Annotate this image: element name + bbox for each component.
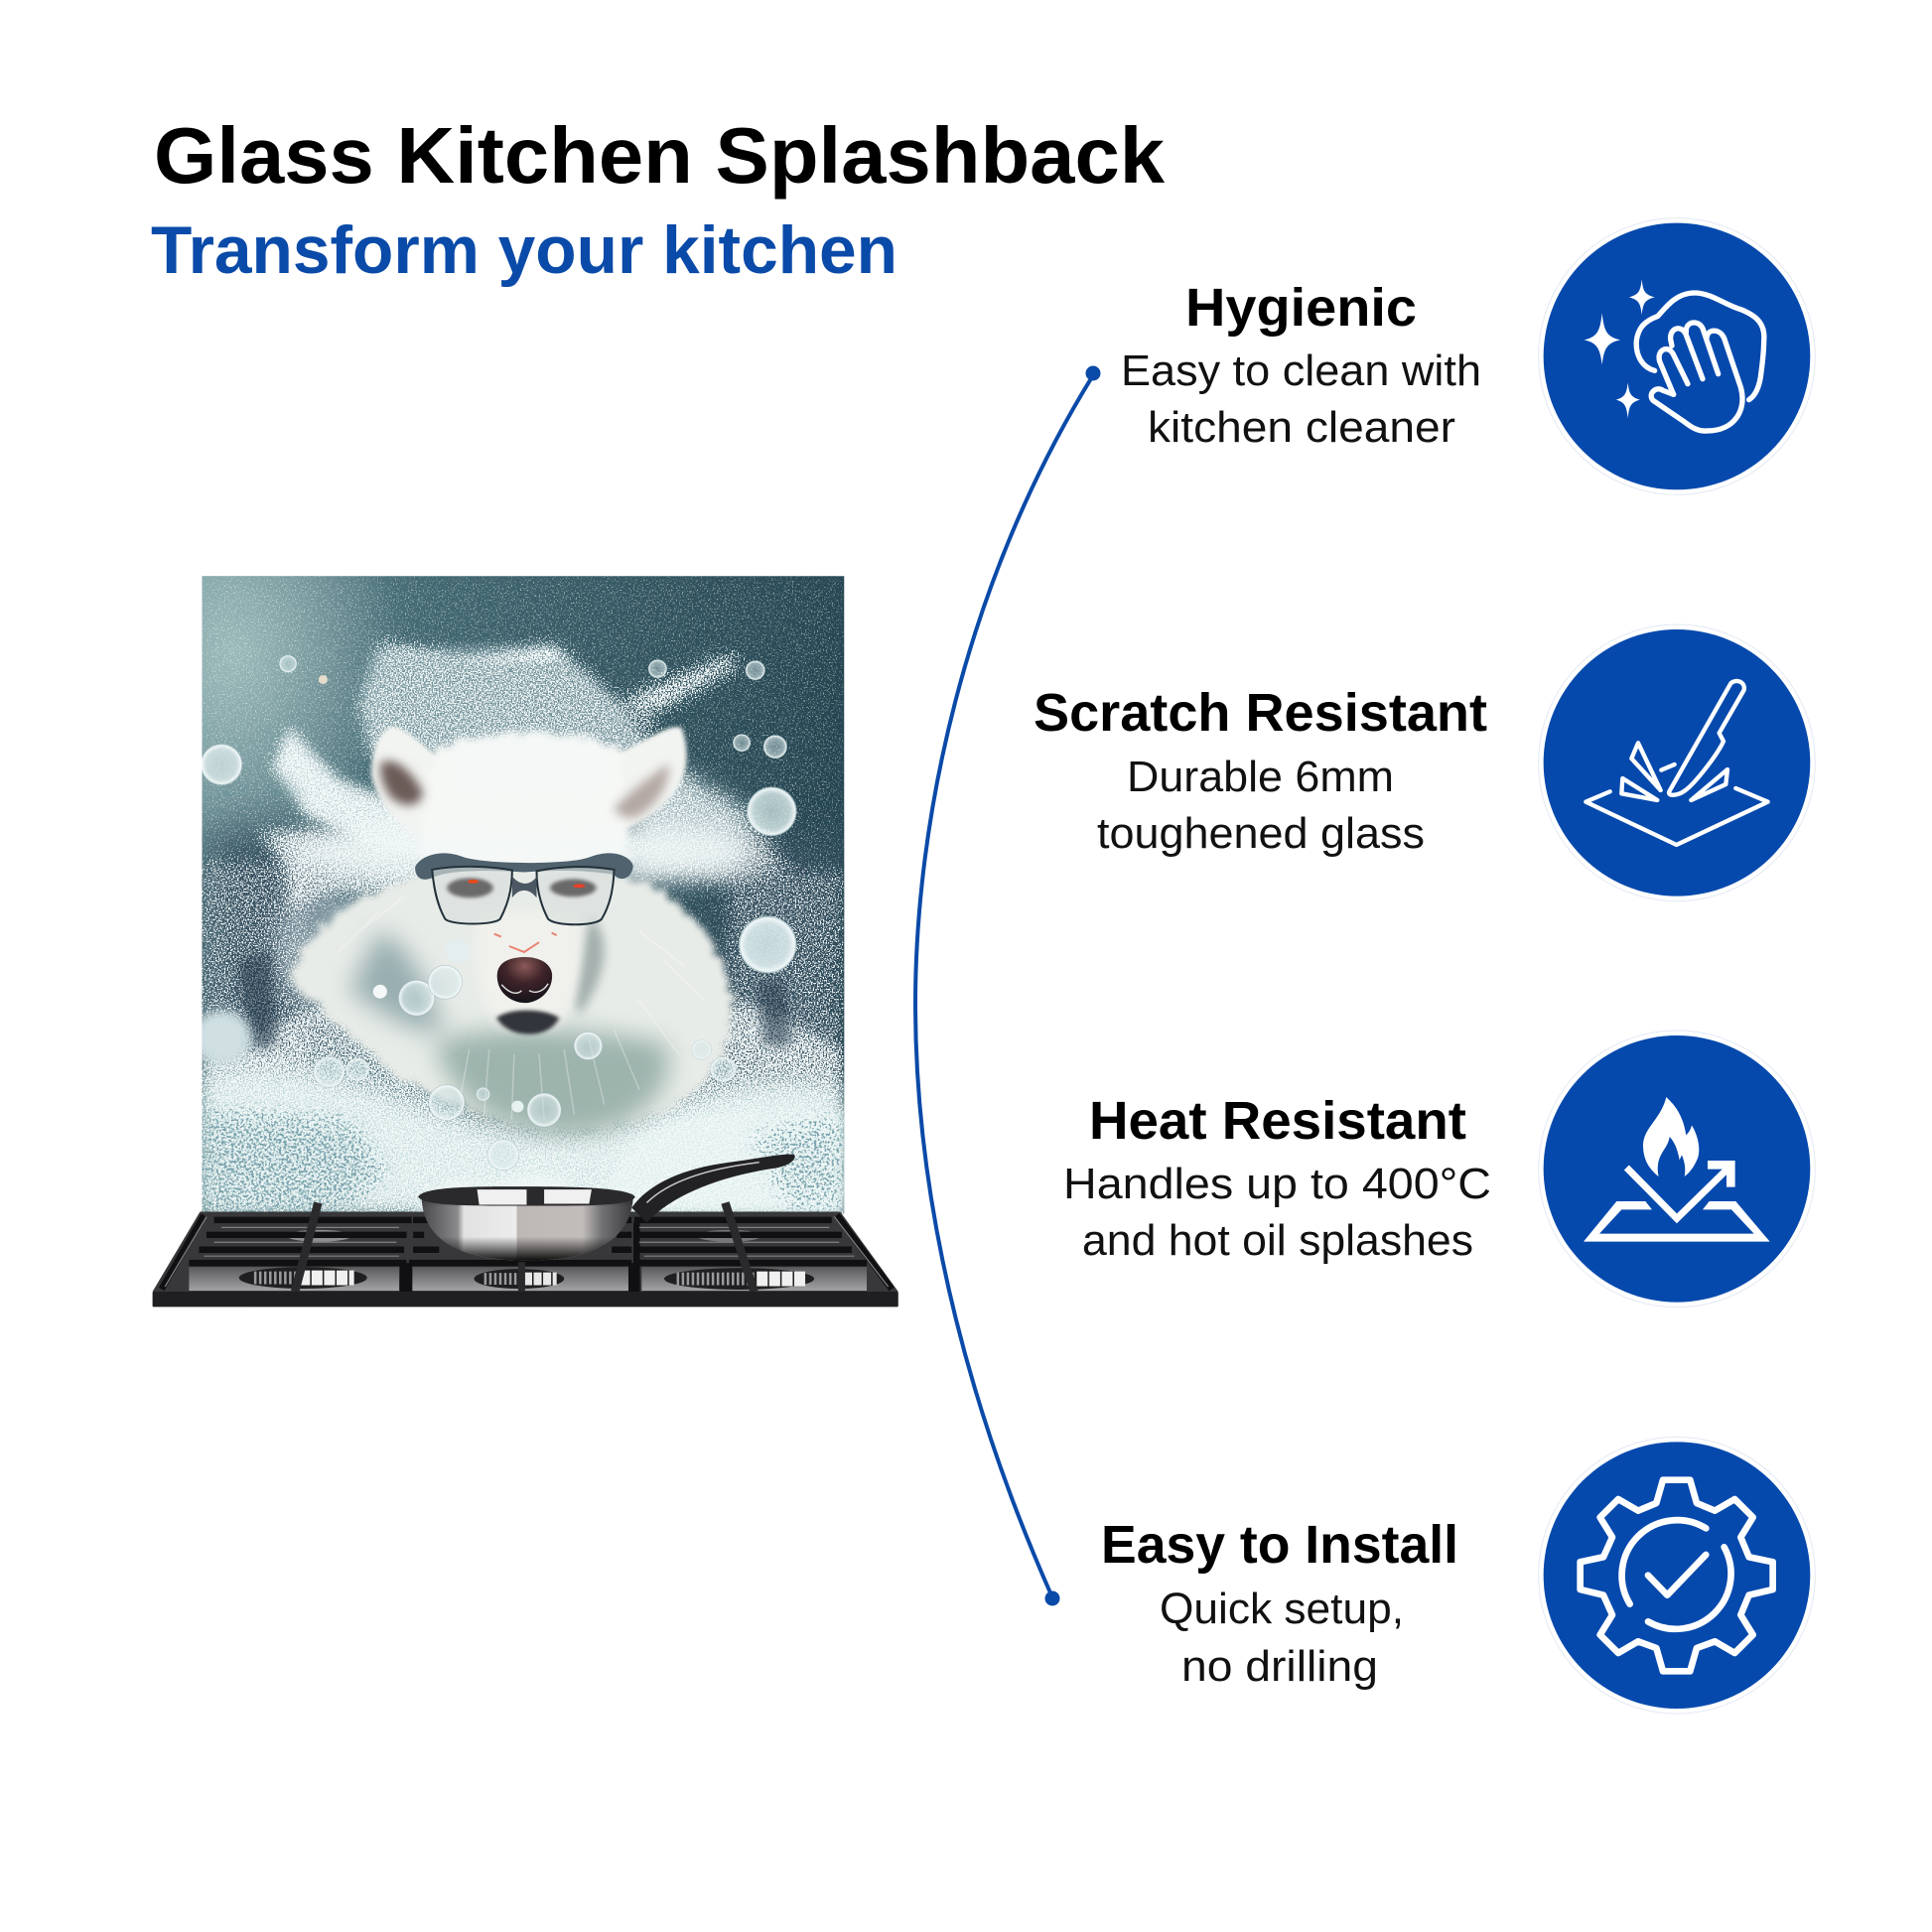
- product image: splashback above gas hob: [153, 576, 898, 1307]
- feature: Hygienic: [1121, 278, 1481, 452]
- feature: Easy to Install: Easy to Install: [1101, 1515, 1458, 1575]
- nose: [497, 957, 552, 1003]
- feature: Easy to Install: no drilling: [1181, 1642, 1378, 1691]
- feature: Scratch Resistant: Scratch Resistant: [1034, 683, 1487, 743]
- dark water behind the wolf: [202, 833, 844, 1069]
- icon: flame over heat-reflecting surface: [1539, 1031, 1815, 1308]
- feature: Hygienic: kitchen cleaner: [1148, 403, 1455, 452]
- subtitle: Transform your kitchen: [151, 212, 897, 288]
- glasses: [415, 853, 633, 924]
- burners: [239, 1230, 814, 1290]
- icon: hand wiping with sparkles: [1539, 218, 1815, 494]
- front edge: [153, 1292, 898, 1307]
- feature: Easy to Install: [1101, 1515, 1458, 1691]
- dark streaks in the water: [236, 951, 791, 1049]
- feature: Heat Resistant: Heat Resistant: [1089, 1091, 1466, 1151]
- feature: Heat Resistant: [1063, 1091, 1491, 1265]
- feature: Easy to Install: Quick setup,: [1160, 1585, 1404, 1633]
- feature: Hygienic: Hygienic: [1185, 278, 1417, 338]
- right ear: [614, 725, 690, 830]
- red flecks on muzzle: [494, 933, 557, 952]
- icon: knife scratching glass: [1539, 624, 1815, 901]
- gas hob: [153, 1203, 898, 1307]
- feature: Heat Resistant: Handles up to 400°C: [1063, 1160, 1491, 1208]
- wolf mane and chest: [289, 862, 735, 1129]
- foam base at the bottom: [202, 1067, 844, 1213]
- mouth: [496, 1011, 559, 1035]
- icon: gear with check mark: [1539, 1437, 1815, 1714]
- feature: Scratch Resistant: Durable 6mm: [1127, 753, 1394, 801]
- grate bars: [162, 1215, 892, 1292]
- feature: Heat Resistant: and hot oil splashes: [1082, 1216, 1473, 1265]
- burner wells: [189, 1267, 399, 1291]
- feature: Hygienic: Easy to clean with: [1121, 346, 1481, 395]
- speckled spray: [202, 576, 844, 1213]
- fur strands: [363, 923, 679, 1120]
- connector curve with end dots: [915, 365, 1100, 1606]
- left ear: [367, 724, 441, 836]
- splashback panel with wolf artwork: [203, 576, 844, 1213]
- frying pan: [418, 1155, 795, 1261]
- teal texture in the foam: [202, 1109, 844, 1213]
- soft haze under the spray: [274, 645, 764, 1016]
- forehead: [419, 732, 629, 869]
- title: Glass Kitchen Splashback: [154, 111, 1166, 200]
- feature: Scratch Resistant: [1034, 683, 1487, 858]
- feature: Scratch Resistant: toughened glass: [1097, 809, 1425, 858]
- bubbles: [201, 655, 796, 1171]
- inner ears: [380, 760, 423, 805]
- white spray over the brow: [291, 629, 653, 864]
